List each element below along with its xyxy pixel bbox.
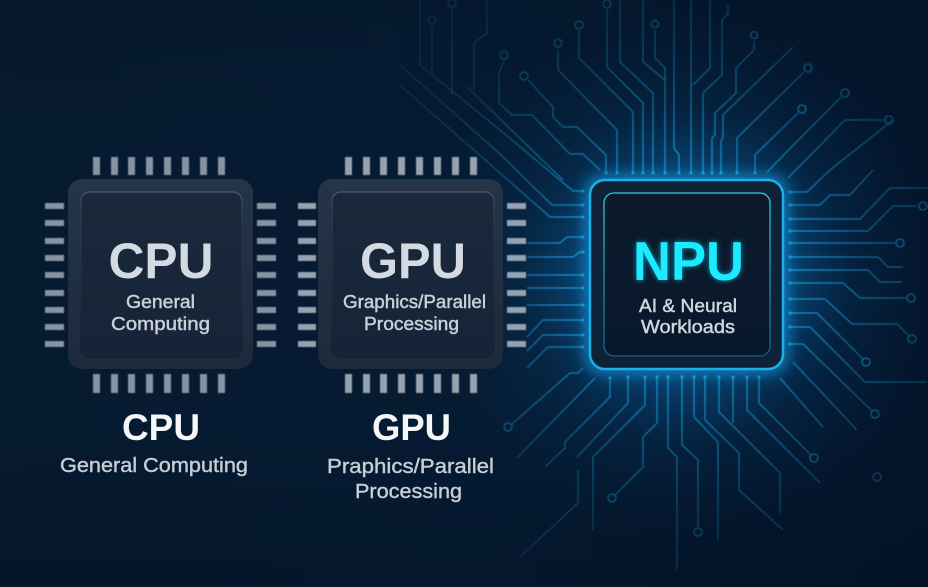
blue glow behind NPU: [400, 0, 928, 587]
CPU pins: [45, 157, 276, 393]
NPU package: [590, 180, 783, 369]
NPU subtitle: AI & Neural: [639, 296, 737, 316]
label: GPU: GPU: [372, 407, 451, 448]
chip: NPU: [584, 174, 789, 375]
CPU chip subtitle: Computing: [111, 314, 210, 334]
circuit traces: [400, 0, 928, 570]
chip: GPU: [298, 157, 526, 393]
label: CPU: CPU: [122, 407, 200, 448]
CPU package: [68, 179, 253, 369]
label: CPU: [60, 407, 248, 477]
NPU title glow: NPU: [633, 230, 744, 292]
NPU outer glow: [584, 174, 789, 375]
NPU subtitle: Workloads: [641, 317, 735, 337]
chip: CPU: [45, 157, 276, 393]
CPU die: [81, 192, 242, 357]
NPU die: [604, 193, 770, 356]
CPU chip title: CPU: [108, 233, 214, 289]
GPU chip subtitle: Graphics/Parallel: [343, 292, 486, 312]
GPU chip subtitle: [343, 292, 486, 334]
CPU chip subtitle: [111, 292, 210, 334]
GPU pins: [298, 157, 526, 393]
GPU chip title: GPU: [360, 233, 466, 289]
label: GPU: [327, 407, 494, 503]
GPU chip subtitle: Processing: [364, 314, 459, 334]
label: GPU: Processing: [355, 481, 462, 503]
trace contact dots at chip edge: [583, 173, 790, 378]
GPU die: [332, 192, 494, 357]
label: CPU: General Computing: [60, 455, 248, 477]
NPU title: NPU: [633, 230, 744, 292]
label: GPU: Praphics/Parallel: [327, 456, 494, 478]
NPU subtitle: [639, 296, 737, 337]
trace end circles: [428, 0, 927, 536]
CPU chip subtitle: General: [126, 292, 195, 312]
GPU package: [318, 179, 503, 369]
